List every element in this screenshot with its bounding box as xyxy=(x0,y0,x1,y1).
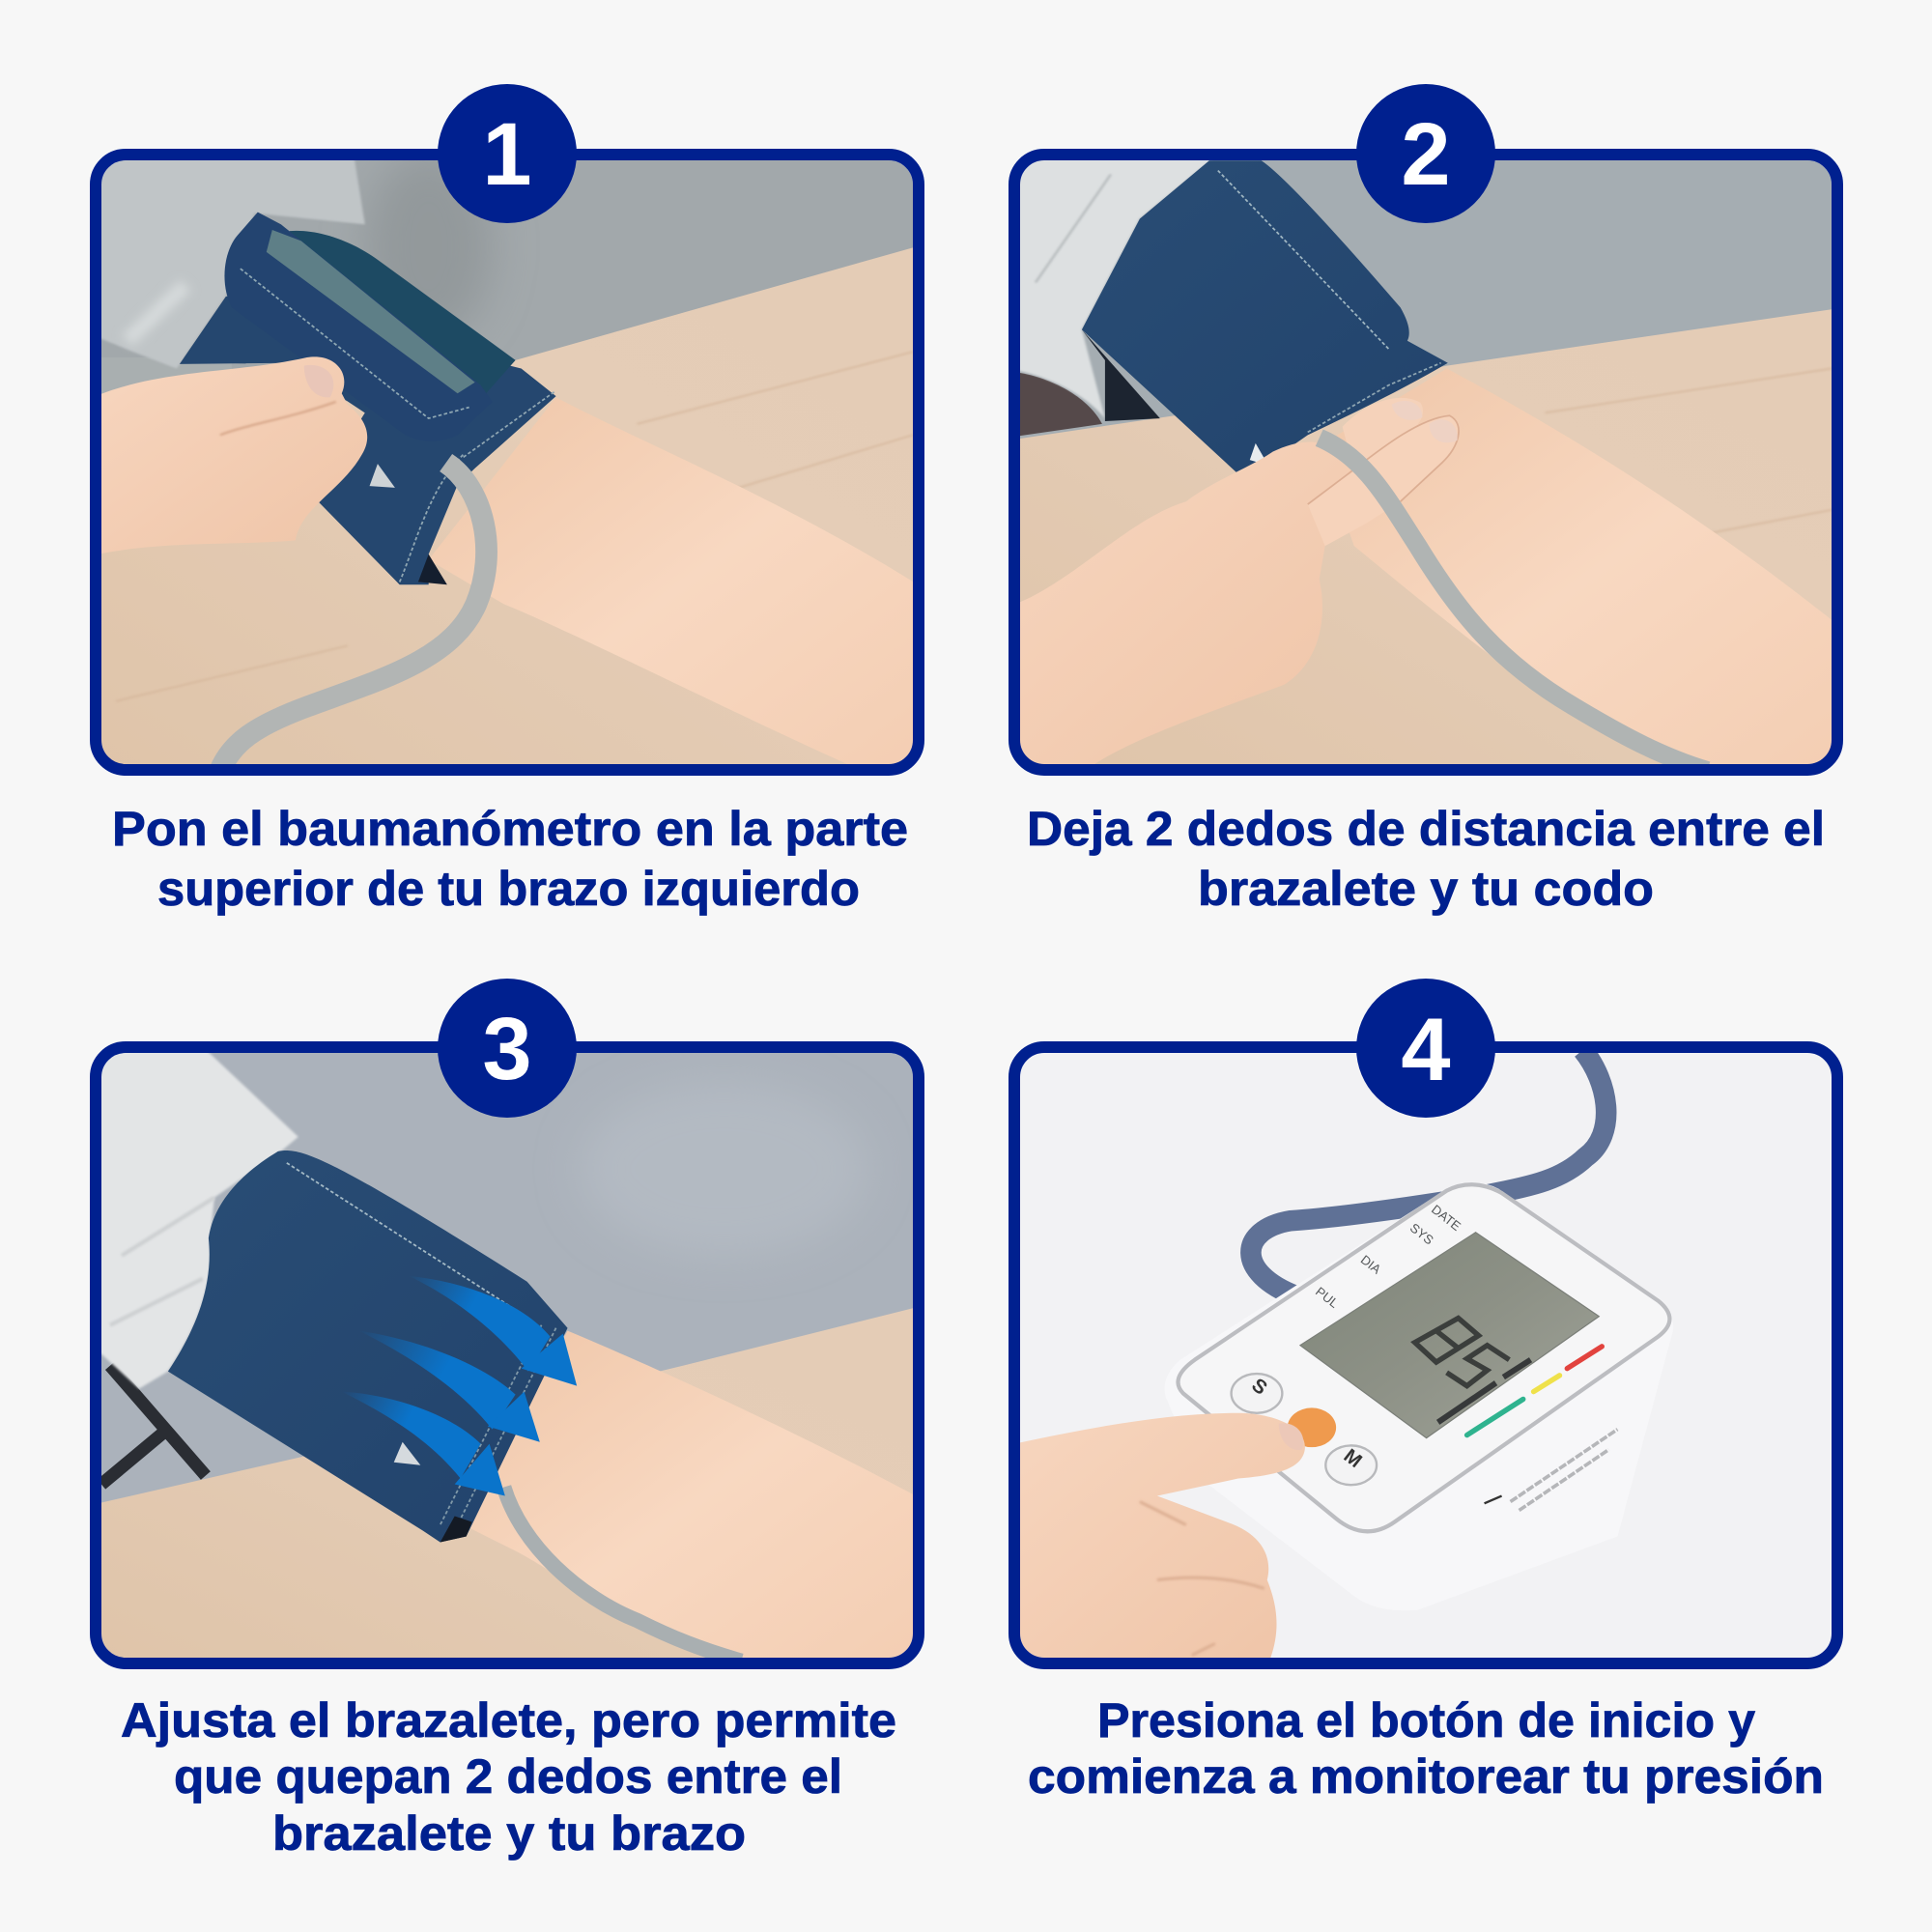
number badge 3: 3 xyxy=(482,1000,532,1098)
caption 4: comienza a monitorear tu presión xyxy=(1028,1749,1824,1804)
icon: white triangle marker xyxy=(1250,443,1264,462)
caption 3: brazalete y tu brazo xyxy=(272,1806,746,1861)
device labels: PUL xyxy=(1313,1284,1342,1311)
icon: white triangle marker xyxy=(370,464,395,488)
caption 1: superior de tu brazo izquierdo xyxy=(157,862,860,916)
hand xyxy=(1007,1413,1305,1672)
caption 1: Pon el baumanómetro en la parte xyxy=(112,802,908,856)
panel: step 2 xyxy=(995,84,1921,916)
tube xyxy=(1251,1050,1606,1296)
caption 2: brazalete y tu codo xyxy=(1198,862,1654,916)
photo: cuff adjusted on arm xyxy=(101,1053,913,1658)
caption 2: Deja 2 dedos de distancia entre el xyxy=(1027,802,1825,856)
caption 3: que quepan 2 dedos entre el xyxy=(174,1749,842,1804)
number badge 1 xyxy=(438,84,577,223)
button start xyxy=(1288,1407,1336,1447)
monitor body xyxy=(1275,1184,1501,1300)
device labels: DIA xyxy=(1358,1252,1384,1277)
number badge 2: 2 xyxy=(1401,105,1451,204)
arrows: tightening xyxy=(342,1276,577,1496)
caption 2 xyxy=(1027,802,1825,916)
photo: finger pressing start button on monitor xyxy=(1020,1053,1671,1658)
LCD screen xyxy=(1300,1233,1599,1438)
panel: step 4 xyxy=(995,979,1921,1804)
button S xyxy=(1232,1374,1282,1413)
photo: hand fastening cuff on arm xyxy=(101,160,913,764)
caption 4: Presiona el botón de inicio y xyxy=(1097,1693,1755,1747)
device labels: SYS xyxy=(1407,1220,1436,1247)
number badge 3 xyxy=(438,979,577,1118)
colour scale xyxy=(1467,1347,1602,1435)
number badge 4 xyxy=(1356,979,1495,1118)
device labels: DATE xyxy=(1429,1202,1463,1234)
button S: S xyxy=(1247,1375,1271,1400)
panel: step 1 xyxy=(58,84,984,916)
caption 1 xyxy=(112,802,908,916)
button M xyxy=(1325,1445,1377,1485)
device labels xyxy=(1313,1202,1463,1311)
frame xyxy=(96,155,919,770)
frame xyxy=(1014,1047,1837,1663)
fine print xyxy=(1511,1430,1617,1511)
icon: white triangle marker xyxy=(394,1442,420,1465)
panel: step 3 xyxy=(58,979,984,1861)
caption 3: Ajusta el brazalete, pero permite xyxy=(121,1693,896,1747)
frame xyxy=(96,1047,919,1663)
photo: two fingers between cuff and elbow xyxy=(1020,160,1832,764)
caption 3 xyxy=(121,1693,896,1861)
hand with two fingers xyxy=(1007,398,1459,773)
number badge 2 xyxy=(1356,84,1495,223)
caption 4 xyxy=(1028,1693,1824,1804)
LCD reading xyxy=(1415,1318,1509,1386)
frame xyxy=(1014,155,1837,770)
button M: M xyxy=(1340,1445,1366,1472)
number badge 1: 1 xyxy=(482,105,532,204)
number badge 4: 4 xyxy=(1401,1001,1451,1099)
